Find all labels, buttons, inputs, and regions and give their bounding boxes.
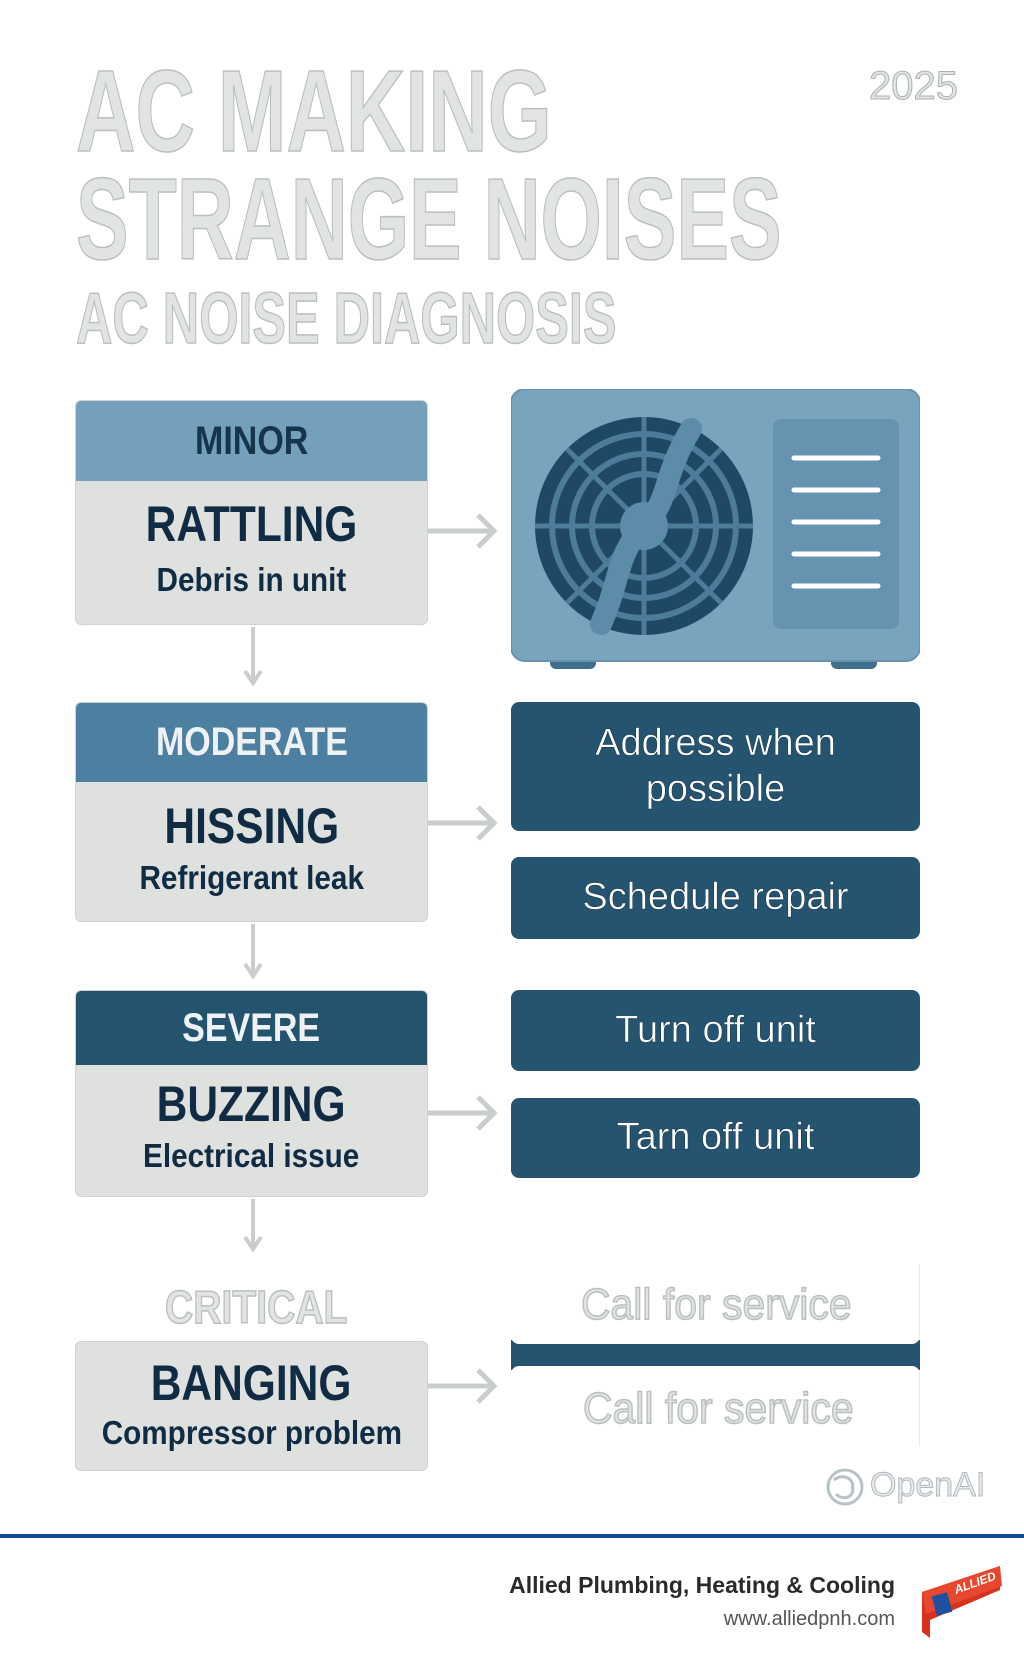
header: severe: SEVERE	[183, 1006, 320, 1050]
arrow: right 3	[428, 1095, 498, 1131]
title: STRANGE NOISES	[76, 154, 782, 284]
noise: rattling: RATTLING	[146, 496, 357, 552]
panel: moderate	[75, 702, 428, 922]
cause: compressor: Compressor problem	[101, 1414, 402, 1451]
label: critical: CRITICAL	[165, 1281, 347, 1333]
action: turn off: Turn off unit	[615, 1009, 816, 1051]
cause: debris: Debris in unit	[157, 561, 346, 598]
icon: Allied logo: ALLIED	[951, 1569, 998, 1597]
action: call for service	[511, 1264, 920, 1446]
arrow: down 3	[244, 1199, 262, 1252]
header: moderate	[76, 703, 427, 782]
arrow: right 4	[428, 1368, 498, 1404]
action: tarn off: Tarn off unit	[617, 1116, 814, 1158]
action: address	[511, 702, 920, 831]
icon: AC unit	[511, 389, 920, 669]
noise: banging: BANGING	[151, 1355, 352, 1411]
header: moderate: MODERATE	[155, 720, 348, 764]
noise: buzzing: BUZZING	[157, 1076, 346, 1132]
action: tarn off	[511, 1098, 920, 1178]
panel: critical	[75, 1341, 428, 1471]
footer: company	[509, 1572, 895, 1630]
cause: electrical: Electrical issue	[143, 1137, 360, 1174]
action: address: Address when	[595, 722, 836, 764]
action: call for service: Call for service	[583, 1384, 854, 1433]
header: severe	[76, 991, 427, 1065]
action: schedule	[511, 857, 920, 939]
panel: severe	[75, 990, 428, 1197]
arrow: right 1	[428, 513, 498, 549]
header: minor: MINOR	[195, 418, 308, 462]
action: call for service: Call for service	[581, 1280, 852, 1329]
header: minor	[76, 401, 427, 481]
title: AC MAKING	[76, 46, 552, 176]
icon: Allied logo	[922, 1566, 1002, 1638]
footer: company: Allied Plumbing, Heating & Cooling	[509, 1572, 895, 1598]
action: schedule: Schedule repair	[582, 876, 849, 918]
arrow: right 2	[428, 805, 498, 841]
noise: hissing: HISSING	[164, 798, 339, 854]
subtitle: AC NOISE DIAGNOSIS	[76, 279, 616, 359]
cause: refrigerant: Refrigerant leak	[139, 859, 364, 896]
footer: company: www.alliedpnh.com	[724, 1608, 895, 1630]
panel: minor	[75, 400, 428, 625]
watermark: OpenAI: OpenAI	[870, 1466, 985, 1504]
year: 2025	[869, 64, 958, 108]
arrow: down 1	[244, 627, 262, 686]
action: turn off	[511, 990, 920, 1071]
action: address: possible	[646, 768, 785, 810]
arrow: down 2	[244, 924, 262, 980]
title	[76, 46, 782, 284]
watermark: OpenAI	[826, 1466, 985, 1506]
divider	[0, 1534, 1024, 1538]
